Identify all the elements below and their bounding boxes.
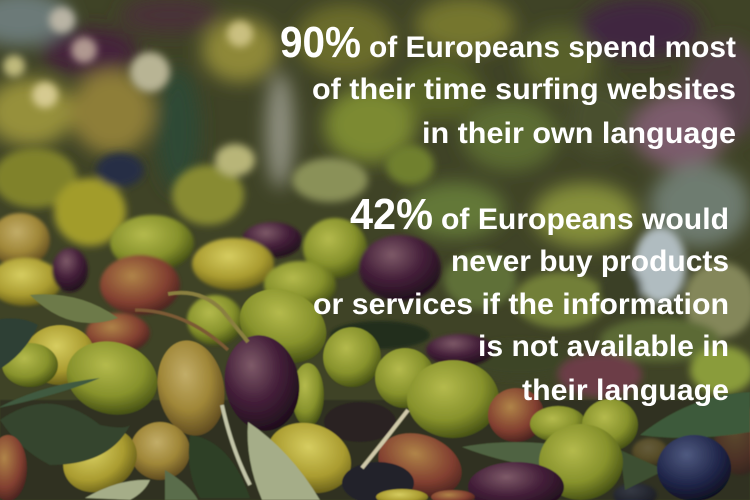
line 3: in their own language <box>422 117 736 150</box>
big number 42%: 42% <box>350 190 433 239</box>
soft highlights on far olives <box>0 7 750 397</box>
statement: 90% of Europeans <box>280 18 736 150</box>
line 1: of Europeans spend most <box>369 31 736 64</box>
big number 90%: 90% <box>280 18 361 67</box>
line 2: never buy products <box>451 245 729 278</box>
midground olives <box>0 213 750 500</box>
statement: 42% of Europeans <box>313 190 729 407</box>
foreground sharp olives and leaves <box>0 275 750 500</box>
line 4: is not available in <box>478 330 729 363</box>
line 1: of Europeans would <box>441 203 729 236</box>
line 2: of their time surfing websites <box>312 73 736 106</box>
line 5: their language <box>522 374 729 407</box>
far blurred olives at the top <box>0 0 750 247</box>
line 3: or services if the information <box>313 288 729 321</box>
